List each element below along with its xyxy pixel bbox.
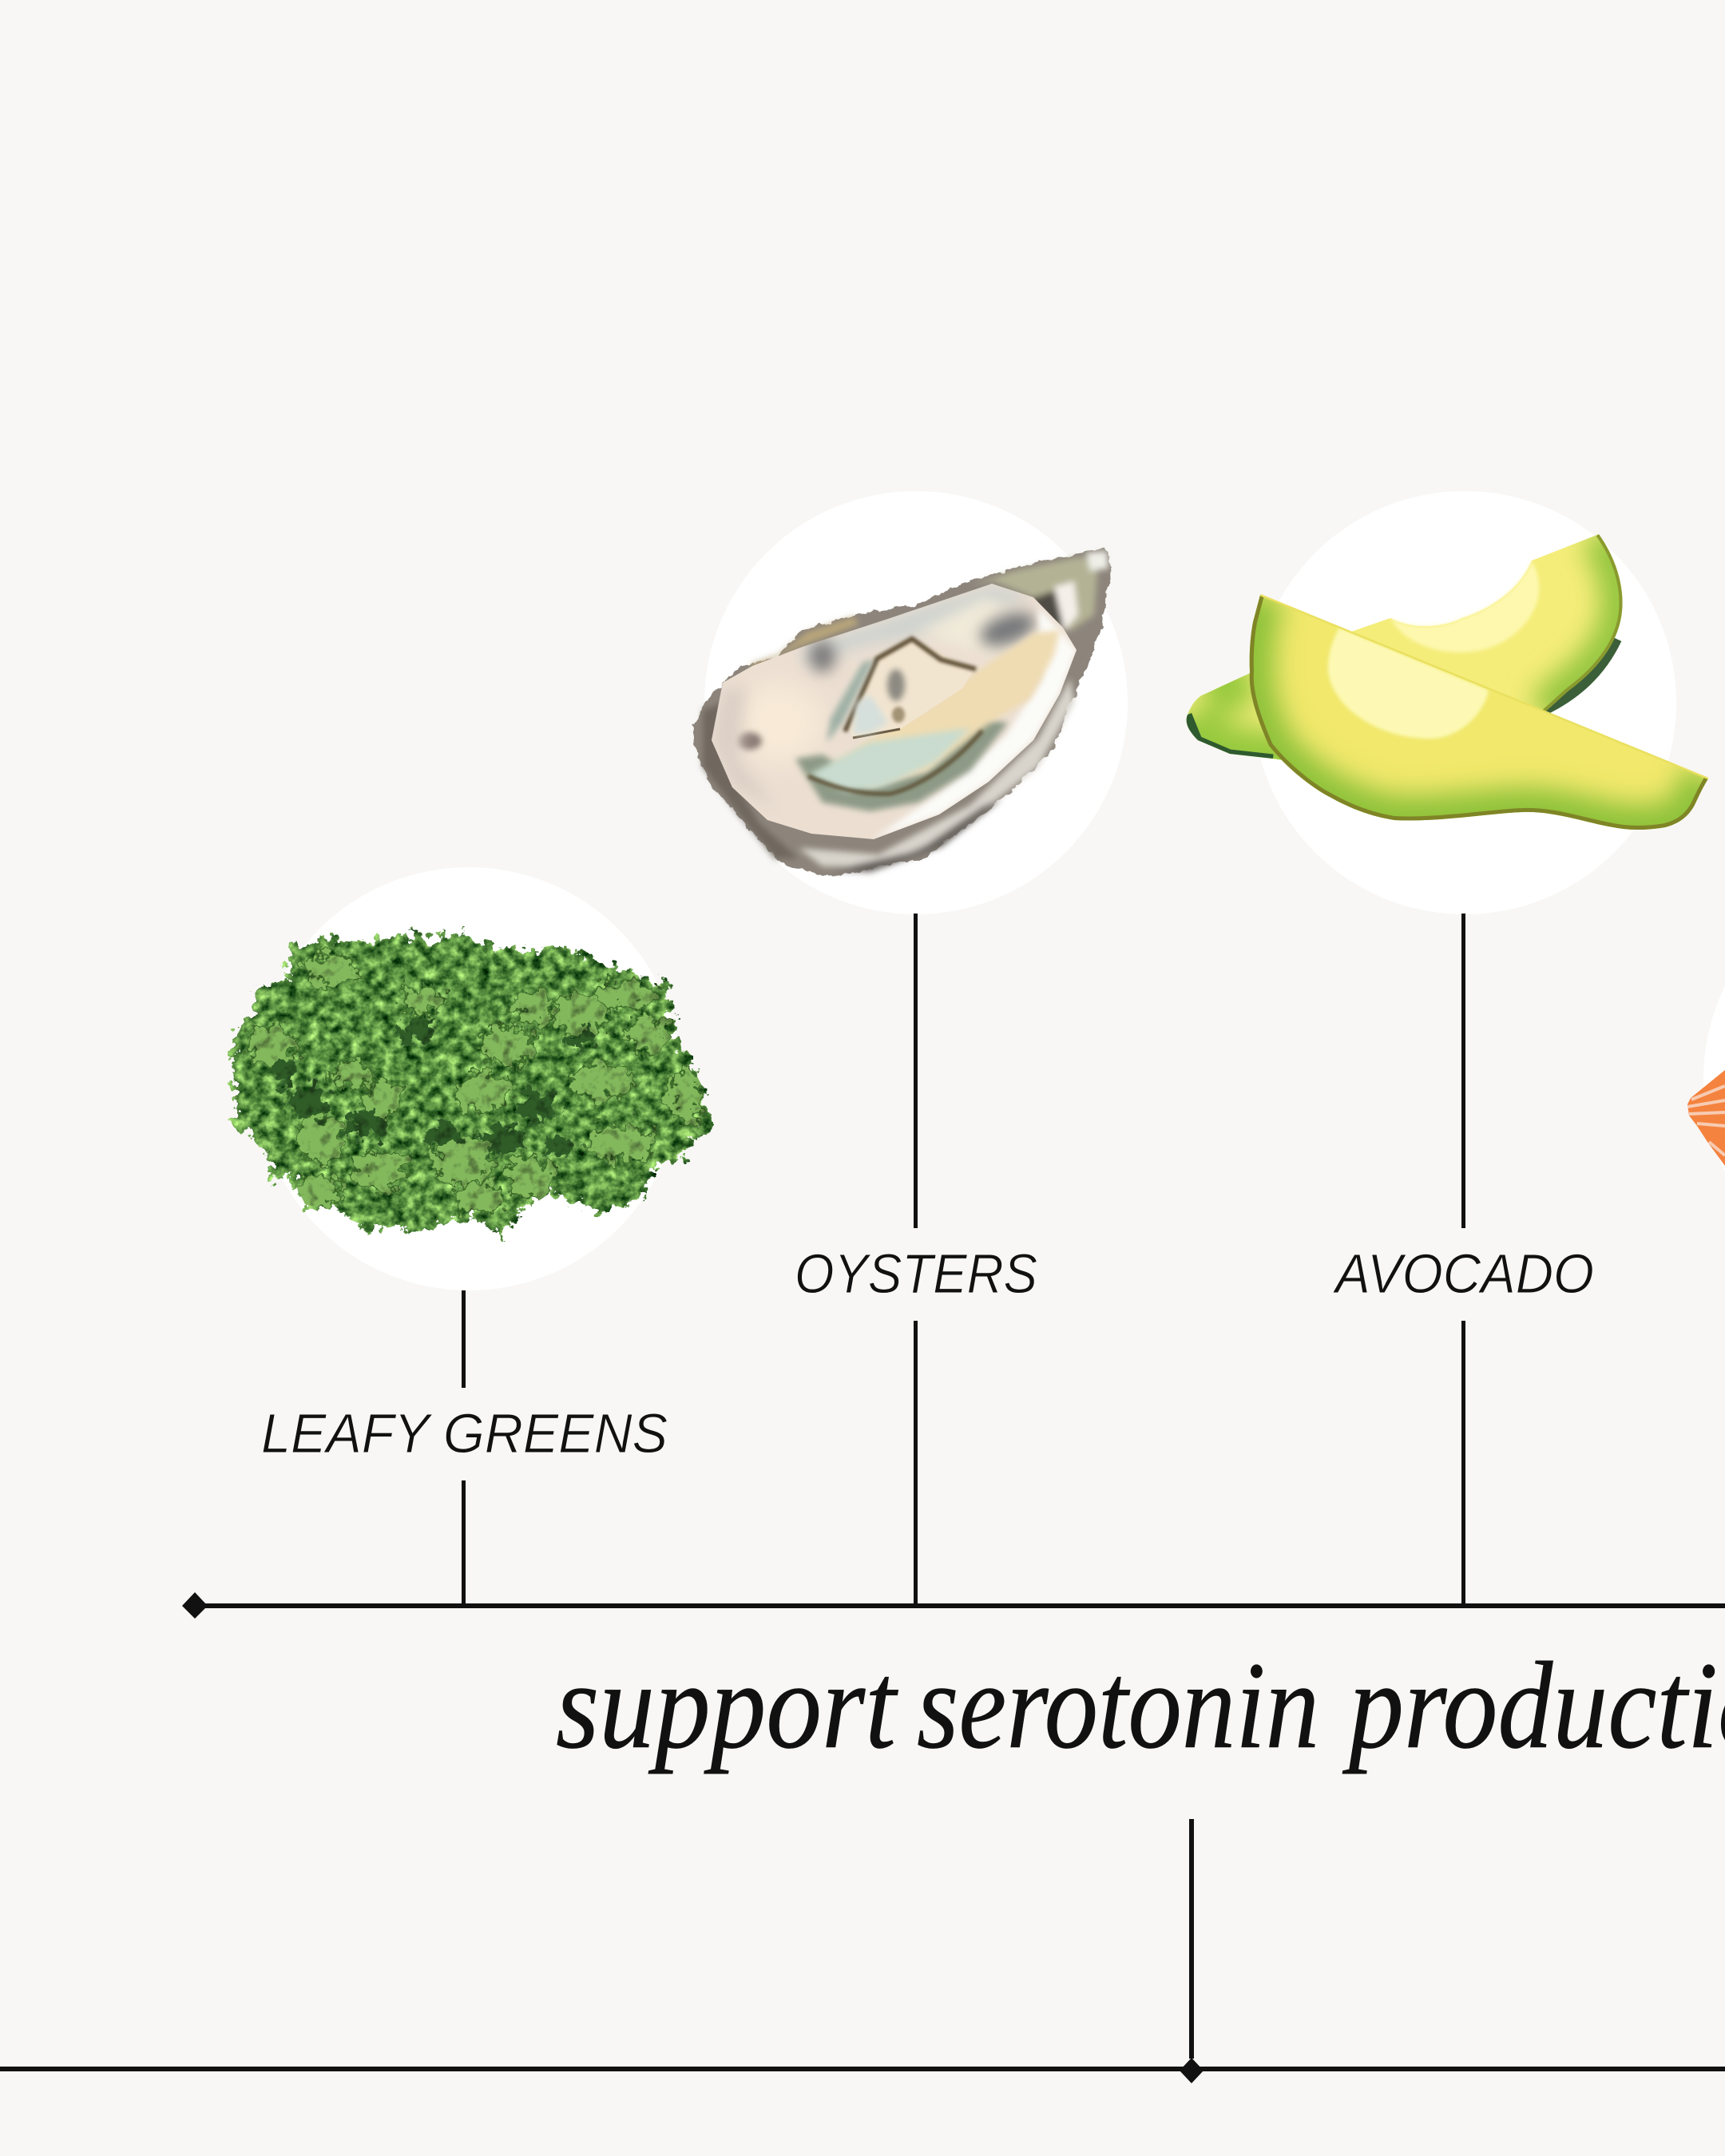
back slice — [1187, 534, 1623, 760]
icon: leafy greens (kale) — [231, 932, 712, 1237]
brown gill edge — [808, 731, 982, 794]
lower horizontal rule with diamond — [0, 2058, 1725, 2083]
shell shading — [712, 584, 1077, 839]
label: avocado: AVOCADO — [1332, 1242, 1594, 1305]
stem: leafy greens connector — [462, 1290, 466, 1604]
label: oysters: OYSTERS — [795, 1242, 1037, 1305]
adductor muscle — [847, 639, 974, 738]
lower stem — [1189, 1819, 1194, 2059]
front slice top edge — [1260, 595, 1708, 779]
yellow belly — [831, 630, 1060, 787]
heading: support serotonin production — [556, 1636, 1725, 1774]
green mantle — [795, 719, 1008, 811]
icon: salmon — [1687, 1070, 1725, 1166]
outer shell — [693, 548, 1112, 877]
upper horizontal rule with diamond — [182, 1592, 1725, 1619]
icon: oyster — [693, 548, 1112, 877]
stem: oysters connector — [914, 914, 918, 1604]
infographic canvas — [0, 491, 1725, 2083]
front slice — [1249, 595, 1708, 830]
back slice skin — [1537, 639, 1616, 713]
pearly inner shell — [712, 584, 1077, 839]
blue-green gills — [809, 728, 970, 792]
label: leafy greens: LEAFY GREENS — [261, 1402, 668, 1464]
heading: support serotonin production: serotonin — [917, 1636, 1319, 1774]
icon: avocado slices — [1187, 534, 1709, 830]
shell hinge and rim highlights — [703, 551, 1108, 872]
back slice pit surface — [1390, 561, 1539, 652]
heading: support serotonin production: support — [556, 1636, 898, 1774]
stem: avocado connector — [1461, 914, 1465, 1604]
panel: white circles behind foods — [257, 491, 1725, 1290]
